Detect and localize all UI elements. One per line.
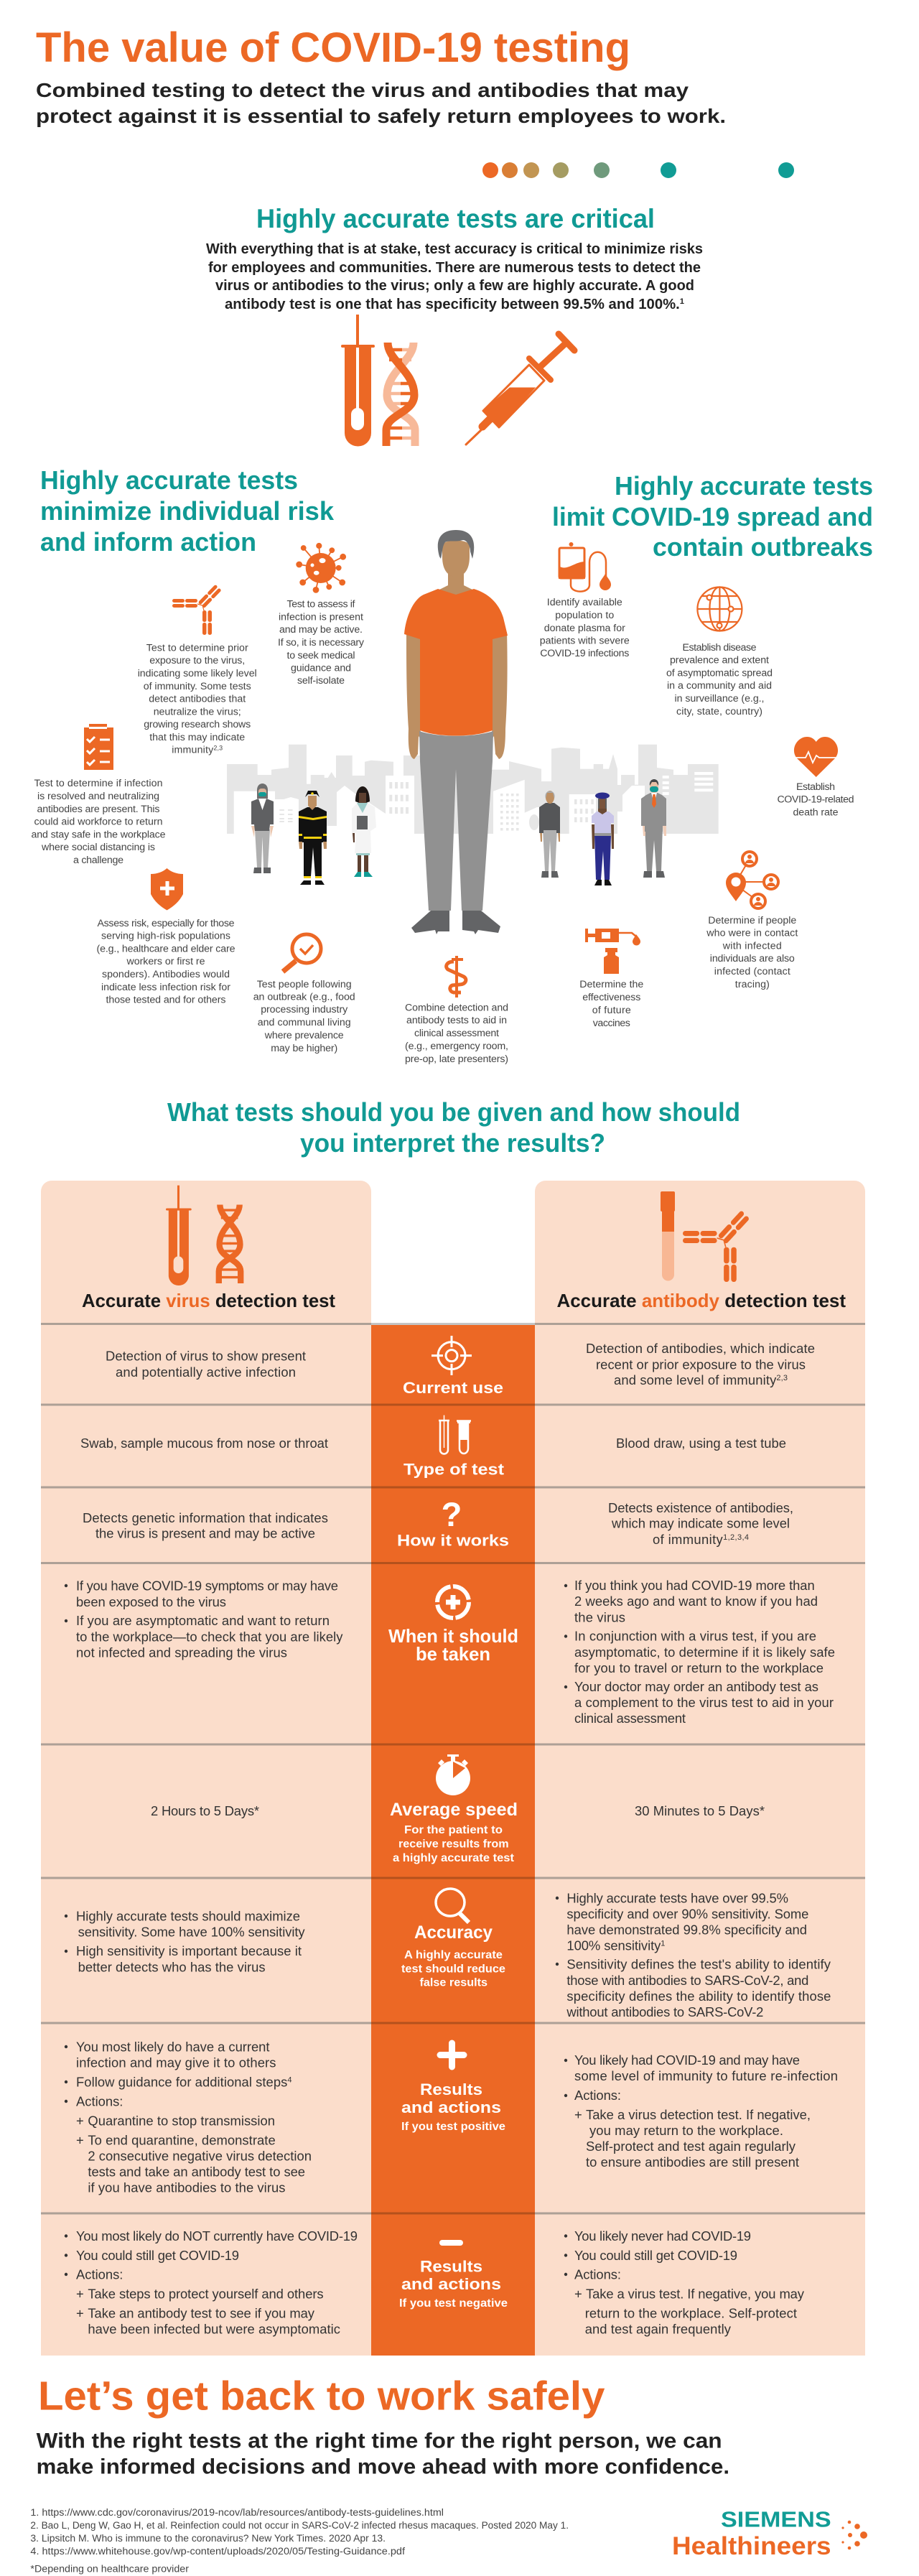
text: vaccines: of future [592,1005,631,1016]
row: results negative [65,2228,805,2337]
cell: antibody use: recent or prior exposure to the virus [596,1357,806,1372]
label: accuracy [401,1889,505,1989]
cell: virus negative: Take an antibody test to see if you may [88,2305,315,2321]
cell: virus use [106,1349,306,1380]
intro paragraph: 1 [680,297,684,306]
text: infection resolved: and stay safe in the workplace [32,829,166,840]
label: when [388,1586,518,1665]
intro paragraph: antibody test is one that has specificity between 99.5% and 100%. [225,297,673,312]
cell: antibody when: Your doctor may order an antibody test as [574,1679,818,1694]
cell: virus accuracy: High sensitivity is important because it [76,1943,302,1958]
label: accuracy: A highly accurate [404,1949,503,1961]
cell: antibody use: and some level of immunity [614,1372,776,1387]
text: contact tracing: infected (contact [714,966,790,977]
text: prior exposure: that this may indicate [149,732,245,743]
text: assess risk: (e.g., healthcare and elder care [96,943,235,954]
text: plasma [540,597,630,659]
cell: virus use: and potentially active infection [116,1364,296,1380]
row: type of test [80,1415,786,1479]
icon: vaccine [585,929,640,974]
cell: antibody when: 2 weeks ago and want to know if you had [574,1594,818,1609]
text: prevalence: of asymptomatic spread [666,667,773,679]
cell: antibody when: In conjunction with a virus test, if you are [574,1629,816,1644]
icon: globe [697,587,742,631]
label: current use: Current use [403,1379,503,1397]
cell: virus when: If you have COVID-19 symptoms or may have [76,1578,338,1594]
row: results positive [65,2040,838,2195]
cell: antibody how: 1,2,3,4 [723,1533,749,1542]
comparison table background [41,1181,865,2356]
panel header: virus test [82,1186,335,1311]
cell: virus how [83,1510,328,1541]
label: accuracy: Accuracy [414,1922,493,1943]
label: results negative: and actions [401,2275,501,2293]
cell: virus positive: 2 consecutive negative virus detection [88,2148,312,2163]
text: outbreak testing: where prevalence [264,1030,344,1041]
text: prior exposure: detect antibodies that [149,694,246,705]
icon: contact tracing [726,852,778,908]
references: 2. Bao L, Deng W, Gao H, et al. Reinfection could not occur in SARS-CoV-2 infected rhesus macaques. Posted 2020 May 1. [30,2520,569,2531]
cell: virus positive: Actions: [76,2094,123,2108]
text: contact tracing: tracing) [735,979,770,990]
references: 4. https://www.whitehouse.gov/wp-content/uploads/2020/05/Testing-Guidance.pdf [30,2546,405,2557]
cell: antibody type: Blood draw, using a test tube [616,1436,786,1451]
text: prior exposure: neutralize the virus; [154,706,241,717]
intro paragraph: With everything that is at stake, test accuracy is critical to minimize risks [206,241,703,257]
text: assess risk: sponders). Antibodies would [102,969,230,980]
label: current use [403,1336,503,1397]
label: type of test: Type of test [403,1461,505,1479]
text: test to assess: Test to assess if [287,599,355,610]
cell: virus accuracy: Highly accurate tests should maximize [76,1909,300,1923]
person: firefighter [299,791,327,885]
logo: Siemens Healthineers: Healthineers [672,2532,831,2560]
intro paragraph: virus or antibodies to the virus; only a few are highly accurate. A good [215,278,694,294]
cell: virus negative: Take steps to protect yourself and others [88,2287,324,2302]
cell: virus positive: tests and take an antibody test to see [88,2164,305,2179]
cell: virus when: If you are asymptomatic and want to return [76,1613,330,1628]
icon: antibody large [683,1210,750,1282]
cell: virus negative: You could still get COVID-19 [76,2248,239,2263]
label: how it works [397,1495,509,1550]
title: The value of COVID-19 testing [36,24,630,71]
text: prior exposure: exposure to the virus, [149,655,245,666]
row: when it should be taken [65,1578,835,1726]
closing heading: Let’s get back to work safely [38,2373,605,2419]
row: average speed [151,1754,765,1864]
cell: virus negative: have been infected but were asymptomatic [88,2322,340,2337]
subtitle: Combined testing to detect the virus and antibodies that may [36,79,689,101]
cell: antibody when [564,1578,835,1726]
cell: antibody accuracy: specificity defines the ability to identify those [566,1989,831,2004]
text: assess risk: Assess risk, especially for those [98,918,235,929]
intro paragraph [206,241,703,312]
text: test to assess: infection is present [279,611,363,623]
text: assess risk: serving high-risk populations [101,931,230,942]
cell: antibody negative: return to the workplace. Self-protect [585,2305,797,2321]
text: assess risk [96,918,235,1006]
closing statement: make informed decisions and move ahead with more confidence. [37,2455,729,2479]
text: death rate: Establish [796,781,835,793]
references [30,2507,569,2575]
cell: virus accuracy: better detects who has the virus [78,1960,266,1975]
central person [404,530,508,934]
cell: antibody negative: + [574,2287,582,2302]
text: vaccines: effectiveness [582,992,640,1003]
heading: limit spread: contain outbreaks [653,532,873,562]
text: outbreak testing: processing industry [261,1004,348,1015]
intro paragraph: for employees and communities. There are numerous tests to detect the [208,260,701,276]
cell: virus positive [65,2040,312,2195]
cell: virus when: to the workplace—to check that you are likely [76,1629,343,1644]
icon: heart with pulse [794,737,838,777]
cell: antibody when: If you think you had COVID-19 more than [574,1578,815,1593]
text: infection resolved: a challenge [73,855,123,866]
text: infection resolved: antibodies are present. This [37,804,159,815]
text: combine detection: Combine detection and [405,1003,508,1014]
person: older woman [539,791,560,878]
text: contact tracing: Determine if people [708,915,796,926]
text: death rate: COVID-19-related [777,794,854,806]
cell: antibody positive: You likely had COVID-19 and may have [574,2052,800,2068]
cell: virus how: Detects genetic information that indicates [83,1510,328,1525]
cell: virus positive: You most likely do have a current [76,2040,270,2055]
icon: antibody [172,585,222,635]
text: assess risk: indicate less infection risk for [101,982,230,993]
text: combine detection [405,1003,508,1065]
text: prevalence: prevalence and extent [670,655,769,666]
text: prior exposure: 2,3 [213,745,223,752]
cell: antibody when: for you to travel or return to the workplace [574,1660,824,1675]
text: prior exposure [138,642,257,756]
heading: limit spread: Highly accurate tests [615,471,873,501]
heading: what tests: you interpret the results? [300,1128,605,1158]
text: prior exposure: growing research shows [144,719,251,730]
cell: antibody positive: you may return to the workplace. [589,2123,783,2138]
text: plasma: Identify available [547,597,622,608]
label: average speed: receive results from [398,1838,509,1850]
cell: virus when: not infected and spreading the virus [76,1645,287,1660]
cell: antibody accuracy: Highly accurate tests have over 99.5% [566,1891,788,1906]
cell: virus type: Swab, sample mucous from nose or throat [80,1436,328,1451]
text: prevalence [666,642,773,717]
icon: syringe [466,334,574,445]
label: average speed: a highly accurate test [393,1852,514,1864]
text: infection resolved: Test to determine if infection [34,778,162,789]
icon: shield [151,868,183,911]
cell: antibody positive: Take a virus detection test. If negative, [586,2107,811,2122]
label: average speed: Average speed [390,1800,518,1820]
icon: virus [297,544,345,592]
heading: minimize individual risk [40,465,335,557]
text: outbreak testing: and communal living [258,1017,351,1028]
cell: antibody negative: You likely never had COVID-19 [574,2228,751,2243]
label: how it works: ? [442,1495,462,1533]
cell: antibody how: Detects existence of antibodies, [608,1500,793,1515]
heading: what tests [167,1097,740,1158]
text: contact tracing: individuals are also [710,953,795,964]
cell: antibody positive: + [574,2107,582,2122]
cell: virus when [65,1578,343,1660]
cell: virus accuracy: sensitivity. Some have 100% sensitivity [78,1925,305,1940]
cell: virus how: the virus is present and may be active [95,1525,315,1541]
text: outbreak testing: an outbreak (e.g., food [253,992,355,1003]
text: prior exposure: indicating some likely level [138,668,257,679]
cell: virus positive: if you have antibodies to the virus [88,2180,286,2195]
text: prior exposure: Test to determine prior [146,642,248,654]
icon: DNA helix [386,343,415,446]
text: combine detection: pre-op, late presenters) [405,1054,508,1065]
label: results positive: and actions [401,2098,501,2116]
icon: magnifier with check [283,934,321,972]
cell: antibody accuracy: those with antibodies to SARS-CoV-2, and [566,1973,808,1988]
text: plasma: population to [555,610,614,621]
cell: antibody how [608,1500,793,1547]
text: test to assess [278,599,365,687]
text: combine detection: clinical assessment [414,1028,499,1039]
references: 1. https://www.cdc.gov/coronavirus/2019-ncov/lab/resources/antibody-tests-guidelines.html [30,2507,444,2518]
label: when: be taken [416,1643,490,1665]
text: combine detection: antibody tests to aid in [406,1015,507,1026]
heading: what tests: What tests should you be given and how should [167,1097,740,1127]
person: doctor [352,786,376,877]
cell: virus negative: You most likely do NOT currently have COVID-19 [76,2228,358,2243]
row: current use [106,1336,815,1397]
text: assess risk: those tested and for others [106,995,225,1006]
text: test to assess: and may be active. [279,624,363,636]
cell: antibody when: the virus [574,1610,625,1624]
cell: antibody negative: Actions: [574,2267,621,2282]
label: accuracy: false results [419,1976,488,1989]
cell: antibody how: of immunity [653,1532,723,1547]
references: *Depending on healthcare provider [30,2564,190,2575]
label: how it works: How it works [397,1531,509,1550]
row: accuracy [65,1889,831,2019]
label: results negative [399,2243,508,2310]
text: contact tracing [706,915,798,990]
text: plasma: donate plasma for [544,623,625,634]
gradient dots [482,162,794,178]
label: results positive: If you test positive [401,2121,505,2133]
text: infection resolved [32,778,166,866]
cell: virus positive: + [76,2132,84,2147]
heading: minimize individual risk: minimize individual risk [40,496,335,526]
cell: antibody when: a complement to the virus test to aid in your [574,1695,834,1710]
title: virus detection test: Accurate virus detection test [82,1290,335,1311]
cell: virus positive: infection and may give it to others [76,2055,276,2070]
heading: limit spread [552,471,873,562]
cell: antibody accuracy: specificity and over 90% sensitivity. Some [566,1907,808,1922]
closing statement: With the right tests at the right time for the right person, we can [37,2429,722,2453]
text: test to assess: self-isolate [297,675,345,687]
person: man in suit with mask [641,779,666,878]
cell: antibody accuracy: have demonstrated 99.8% specificity and [566,1922,807,1938]
cell: antibody how: which may indicate some level [611,1516,790,1531]
label: results positive: Results [420,2080,482,2098]
cell: antibody when: clinical assessment [574,1711,686,1726]
cell: antibody accuracy: without antibodies to SARS-CoV-2 [566,2004,763,2019]
cell: virus positive: 4 [287,2076,291,2085]
cell: antibody positive: Self-protect and test again regularly [586,2139,796,2154]
logo: Siemens Healthineers: SIEMENS [721,2507,831,2532]
text: death rate [777,781,854,818]
text: prevalence: in surveillance (e.g., [675,693,764,705]
label: type of test [403,1415,505,1479]
closing statement [37,2429,729,2479]
cell: virus negative: + [76,2287,84,2302]
cell: virus speed: 2 Hours to 5 Days* [151,1803,259,1818]
text: test to assess: If so, it is necessary [278,637,365,648]
label: when: When it should [388,1625,518,1647]
cell: antibody use: 2,3 [776,1374,788,1382]
text: outbreak testing [253,979,355,1054]
references: 3. Lipsitch M. Who is immune to the coronavirus? New York Times. 2020 Apr 13. [30,2533,386,2544]
cell: antibody positive: to ensure antibodies are still present [586,2154,799,2170]
logo: Siemens Healthineers [672,2507,867,2560]
text: plasma: patients with severe [540,636,630,647]
text: prior exposure: immunity [172,745,213,756]
city skyline [227,745,719,834]
cell: antibody negative: Take a virus test. If negative, you may [586,2287,805,2302]
panel header: antibody test [557,1191,846,1311]
text: prevalence: in a community and aid [667,680,772,692]
cell: antibody use [586,1341,815,1387]
heading: minimize individual risk: and inform action [40,527,256,557]
cell: antibody negative: and test again frequently [585,2322,732,2337]
cell: virus positive: Follow guidance for additional steps [76,2075,287,2090]
icon: caduceus [447,956,466,998]
text: plasma: COVID-19 infections [540,648,629,659]
cell: virus negative: + [76,2305,84,2321]
person: woman in suit with mask [251,784,274,873]
cell: antibody when: asymptomatic, to determine if it is likely safe [574,1645,835,1660]
text: vaccines: vaccines [593,1018,630,1029]
title: antibody detection test: Accurate antibody detection test [557,1290,846,1311]
cell: virus positive: + [76,2113,84,2128]
text: outbreak testing: Test people following [257,979,352,990]
text: vaccines [579,979,643,1029]
cell: antibody positive: some level of immunity to future re-infection [574,2068,838,2083]
cell: antibody negative [564,2228,805,2337]
cell: virus negative: Actions: [76,2267,123,2282]
cell: virus positive: To end quarantine, demonstrate [88,2132,276,2147]
cell: antibody accuracy: Sensitivity defines the test's ability to identify [566,1957,831,1972]
icon: virus DNA [219,1205,241,1283]
row: how it works [83,1495,793,1550]
label: results negative: If you test negative [399,2297,508,2310]
text: infection resolved: could aid workforce to return [34,817,162,828]
text: outbreak testing: may be higher) [271,1043,337,1054]
person: police officer [592,793,614,885]
icon: virus swab tube [166,1186,192,1285]
text: prior exposure: of immunity. Some tests [144,681,251,692]
label: average speed: For the patient to [404,1824,503,1836]
cell: antibody accuracy: 1 [661,1940,665,1948]
cell: antibody accuracy [556,1891,831,2019]
label: results positive [401,2043,505,2133]
cell: antibody speed: 30 Minutes to 5 Days* [635,1803,765,1818]
cell: antibody negative: You could still get COVID-19 [574,2248,737,2263]
text: prevalence: Establish disease [682,642,757,654]
text: contact tracing: with infected [722,940,782,952]
subtitle: protect against it is essential to safely return employees to work. [36,105,726,127]
cell: virus positive: Quarantine to stop transmission [88,2113,275,2128]
text: test to assess: guidance and [291,662,351,674]
text: contact tracing: who were in contact [706,928,798,939]
heading: limit spread: limit COVID-19 spread and [552,502,873,531]
icon: plasma bag [559,542,611,592]
text: assess risk: workers or first re [126,956,205,967]
cell: antibody positive [564,2052,838,2170]
label: average speed [390,1754,518,1864]
text: infection resolved: where social distancing is [41,842,155,853]
cell: antibody use: Detection of antibodies, which indicate [586,1341,815,1356]
cell: virus accuracy [65,1909,305,1975]
cell: virus when: been exposed to the virus [76,1594,226,1609]
cell: antibody accuracy: 100% sensitivity [566,1938,661,1953]
cell: virus use: Detection of virus to show present [106,1349,306,1364]
text: prevalence: city, state, country) [676,706,762,717]
label: accuracy: test should reduce [401,1963,505,1975]
icon: swab tube [341,315,375,447]
text: combine detection: (e.g., emergency room, [405,1041,508,1052]
heading: tests are critical: Highly accurate tests are critical [256,204,655,233]
icon: clipboard checklist [84,724,113,770]
text: infection resolved: is resolved and neutralizing [37,791,159,802]
text: death rate: death rate [793,806,839,818]
subtitle [36,79,726,127]
heading: minimize individual risk: Highly accurate tests [40,465,298,495]
text: test to assess: to seek medical [287,650,355,661]
cell: antibody positive: Actions: [574,2088,621,2103]
label: results negative: Results [420,2257,482,2275]
icon: blood tube [661,1191,675,1281]
cell: virus negative [65,2228,358,2337]
text: vaccines: Determine the [579,979,643,990]
